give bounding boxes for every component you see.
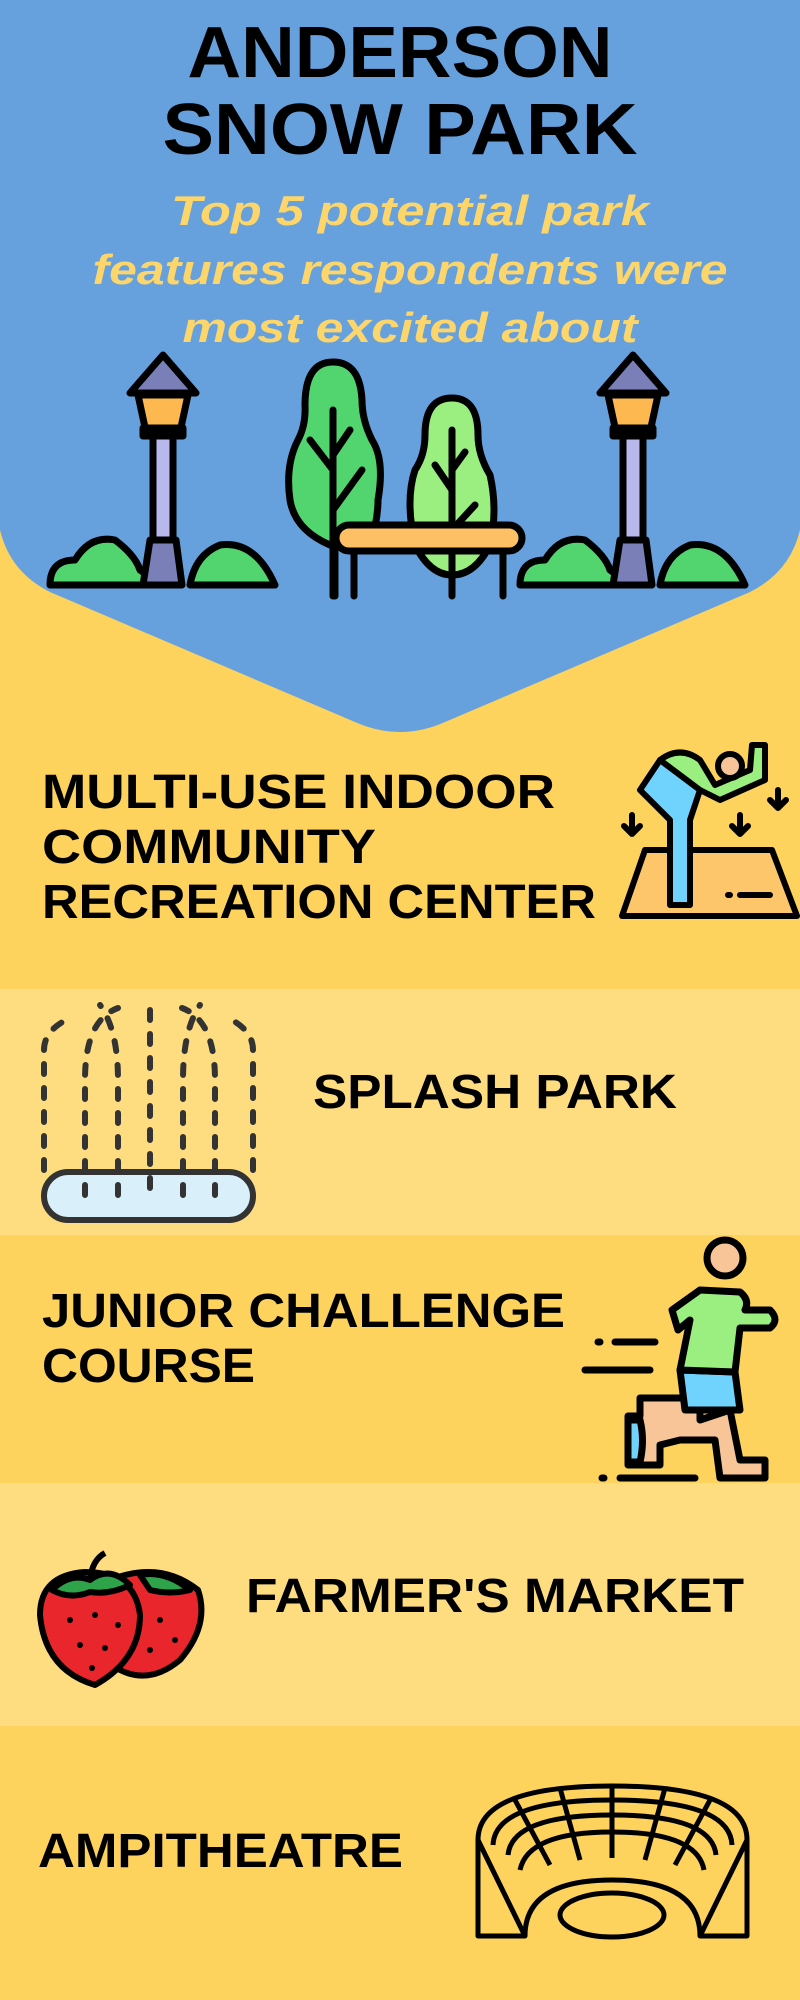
title: SNOW PARK <box>162 90 638 170</box>
subtitle: most excited about <box>182 304 640 351</box>
heading: COMMUNITY <box>42 821 376 874</box>
subtitle <box>92 187 728 351</box>
title: ANDERSON <box>188 13 612 93</box>
bench <box>336 525 522 551</box>
heading: JUNIOR CHALLENGE <box>42 1285 565 1338</box>
subtitle: features respondents were <box>92 246 728 293</box>
panel: ampitheatre <box>38 1786 747 1937</box>
heading: FARMER'S MARKET <box>246 1570 744 1623</box>
icon: park scene <box>50 355 745 596</box>
panel: splash park <box>44 1005 677 1220</box>
heading <box>42 1285 565 1393</box>
subtitle: Top 5 potential park <box>171 187 652 234</box>
icon: yoga <box>622 745 797 916</box>
left lamp <box>50 355 275 585</box>
icon: fountain <box>44 1005 253 1220</box>
icon: runner <box>585 1240 775 1478</box>
icon: amphitheatre <box>478 1786 747 1937</box>
panel: multi-use indoor recreation center <box>42 745 797 929</box>
heading: COURSE <box>42 1340 255 1393</box>
icon: strawberries <box>40 1553 201 1685</box>
header panel <box>0 0 800 732</box>
heading: AMPITHEATRE <box>38 1825 403 1878</box>
panel: junior challenge course <box>42 1240 775 1478</box>
panel: farmer's market <box>40 1553 744 1685</box>
heading <box>42 766 596 929</box>
title <box>162 13 638 170</box>
heading: MULTI-USE INDOOR <box>42 766 555 819</box>
heading: SPLASH PARK <box>313 1066 677 1119</box>
right lamp <box>520 355 745 585</box>
trees <box>289 362 380 545</box>
heading: RECREATION CENTER <box>42 876 596 929</box>
